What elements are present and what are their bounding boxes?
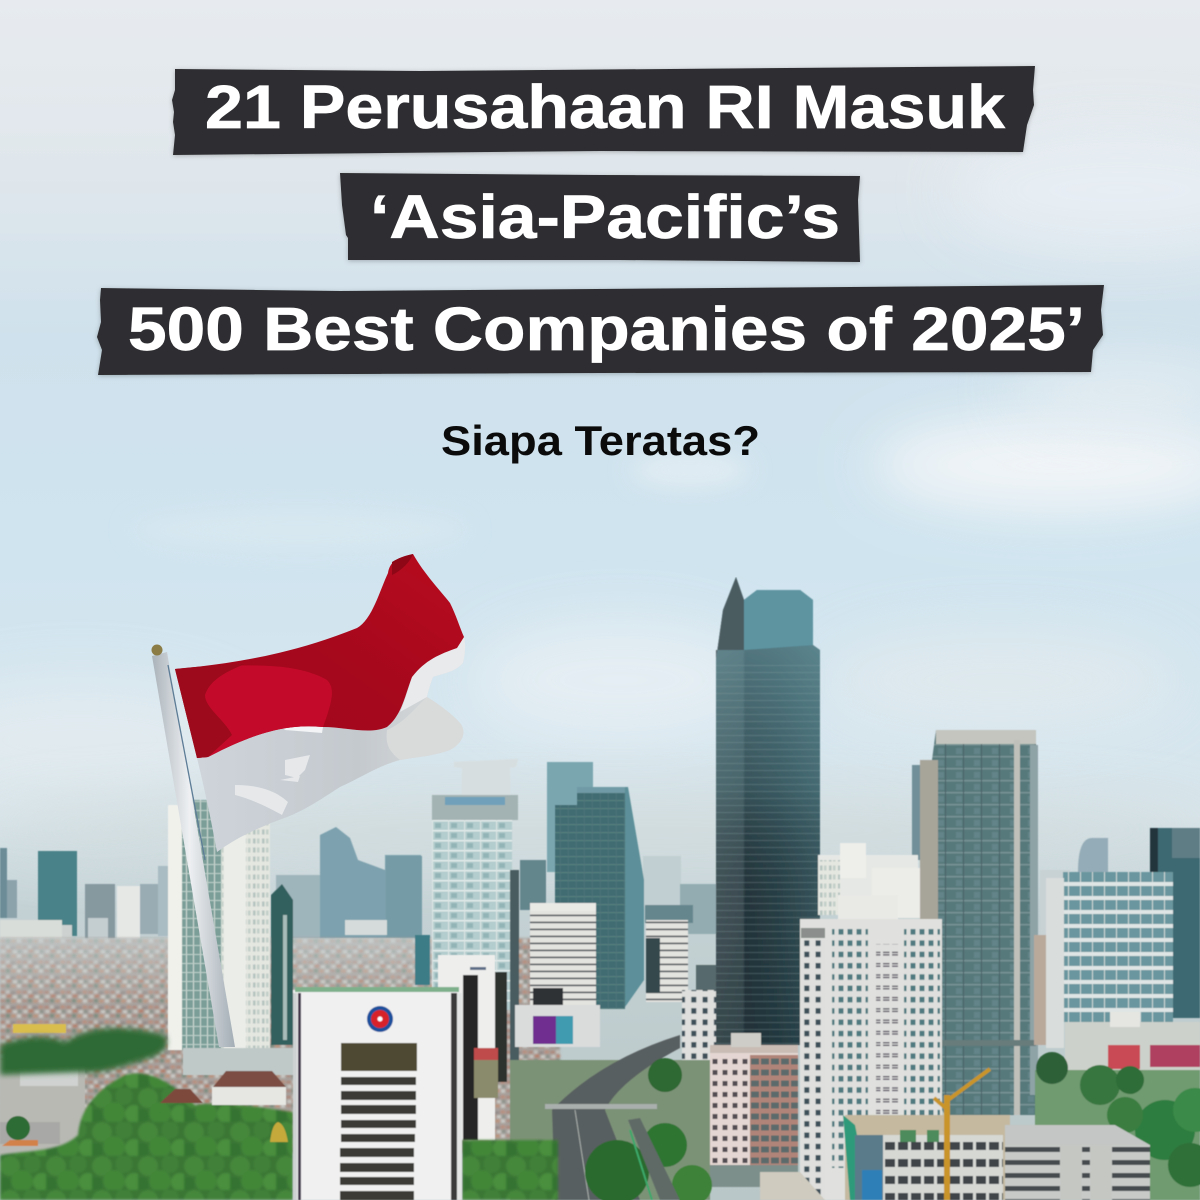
grey houses — [0, 1060, 85, 1155]
white striped building — [515, 903, 600, 1047]
podium bottom — [760, 1172, 825, 1200]
flagpole — [152, 644, 235, 1047]
low roofs — [183, 1048, 293, 1075]
right residential tower — [920, 730, 1040, 1115]
white residential tower — [168, 800, 270, 1050]
city scene — [0, 577, 1200, 1200]
title line 3: 500 Best Companies of 2025’ — [128, 295, 1085, 363]
white building with grid windows — [800, 895, 942, 1200]
flag with pole — [152, 554, 465, 1047]
trees below centre — [462, 1140, 558, 1200]
foreground trees left — [0, 1028, 293, 1200]
front white office building — [293, 987, 462, 1200]
left teal tower — [38, 851, 77, 936]
logo emblem — [367, 1006, 393, 1032]
title line 2: ‘Asia-Pacific’s — [370, 183, 840, 251]
dark green tower — [271, 884, 293, 1045]
flag white stripe — [197, 637, 465, 852]
flag red stripe — [175, 554, 464, 758]
white tower behind front building — [438, 955, 507, 1140]
distant skyline — [0, 765, 1108, 960]
small mid buildings — [645, 905, 716, 1090]
subtitle: Siapa Teratas? — [441, 417, 760, 464]
crane — [934, 1069, 990, 1200]
road — [510, 1035, 712, 1200]
low retail right — [1065, 1012, 1200, 1070]
glass office tower with crown — [415, 759, 519, 1070]
title tape 2 — [340, 173, 860, 262]
billboard — [533, 1016, 573, 1044]
right side trees — [1035, 1052, 1200, 1200]
white mid-rise cluster behind — [818, 843, 920, 918]
pink and brown mid-rise — [710, 1033, 798, 1187]
clouds — [0, 130, 1200, 870]
main glass skyscraper — [716, 577, 820, 1045]
balcony hotel building right — [1034, 828, 1200, 1048]
title tape 3 — [97, 285, 1104, 375]
title tape 1 — [172, 66, 1035, 155]
grey office right — [1005, 1125, 1150, 1200]
golden dome — [270, 1122, 288, 1142]
window bands — [340, 1043, 417, 1200]
title line 1: 21 Perusahaan RI Masuk — [205, 73, 1005, 141]
teal twin towers — [520, 762, 644, 1010]
city ground houses — [0, 938, 560, 1153]
green roof deck — [684, 1088, 710, 1120]
construction site — [843, 1069, 1010, 1200]
yellow low building — [13, 1024, 66, 1033]
